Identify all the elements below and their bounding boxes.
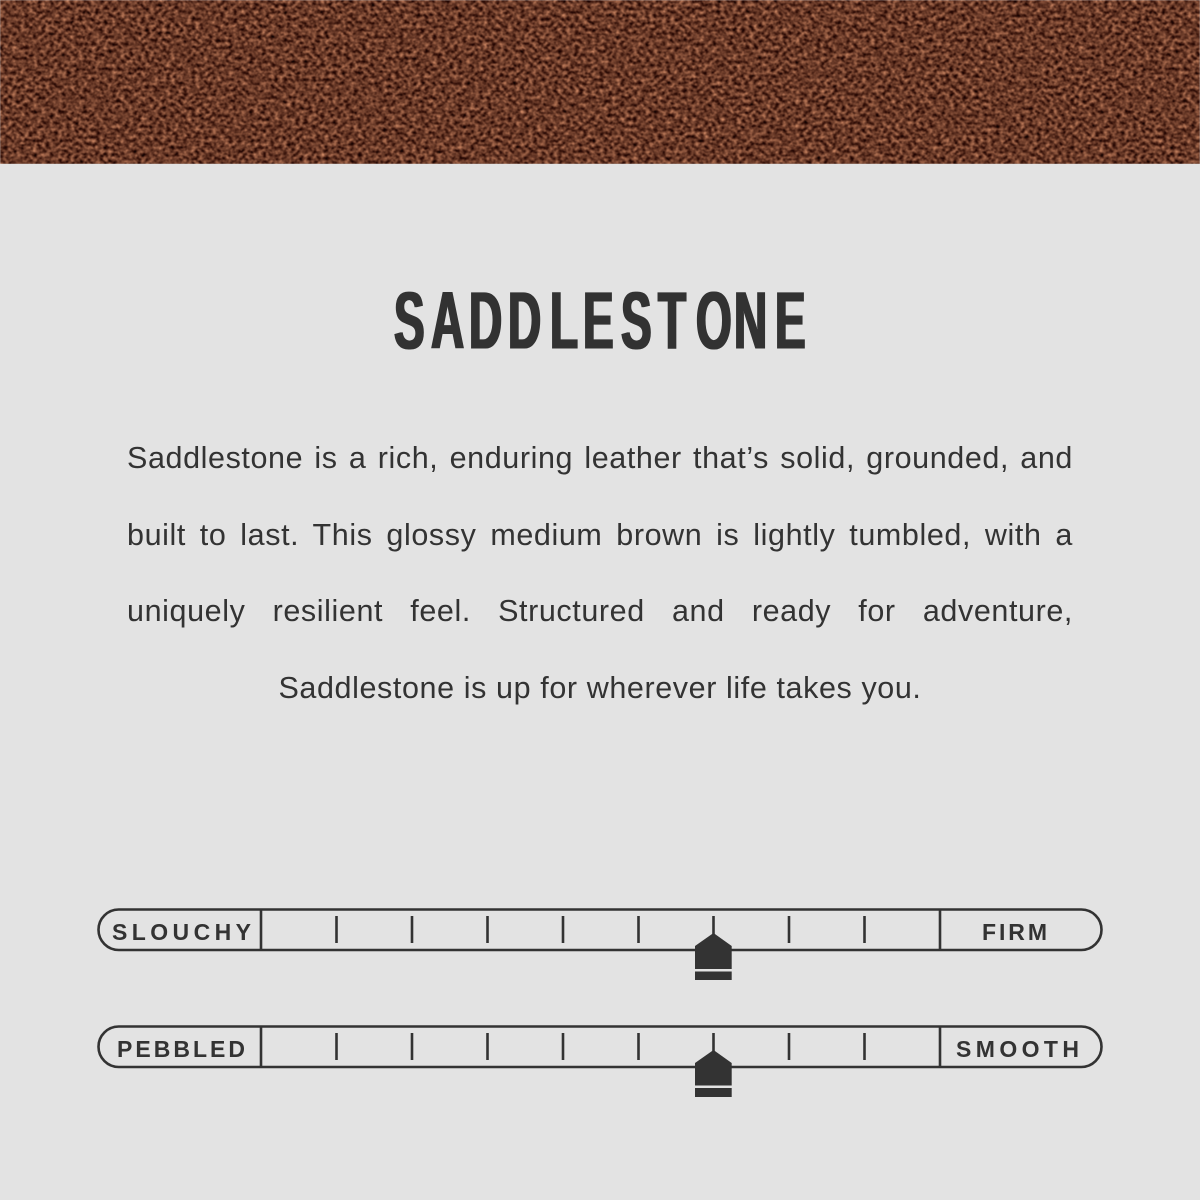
title: SADDLESTONE <box>394 276 806 367</box>
label: smooth: SMOOTH <box>956 1036 1079 1062</box>
description paragraph: Saddlestone is a rich, enduring leather that’s solid, grounded, and <box>127 441 1073 475</box>
label: firm: FIRM <box>982 919 1047 945</box>
description paragraph <box>127 441 1073 705</box>
scale track: pebbled to smooth <box>98 1026 1102 1067</box>
description paragraph: uniquely resilient feel. Structured and ready for adventure, <box>127 594 1073 628</box>
marker: pebbled to smooth <box>695 1050 732 1097</box>
leather texture banner <box>0 0 1200 164</box>
scale track: slouchy to firm <box>98 909 1102 950</box>
label: pebbled: PEBBLED <box>117 1036 245 1062</box>
marker: slouchy to firm <box>695 933 732 980</box>
description paragraph: Saddlestone is up for wherever life takes you. <box>278 671 922 705</box>
label: slouchy: SLOUCHY <box>112 919 251 945</box>
description paragraph: built to last. This glossy medium brown is lightly tumbled, with a <box>127 518 1073 552</box>
